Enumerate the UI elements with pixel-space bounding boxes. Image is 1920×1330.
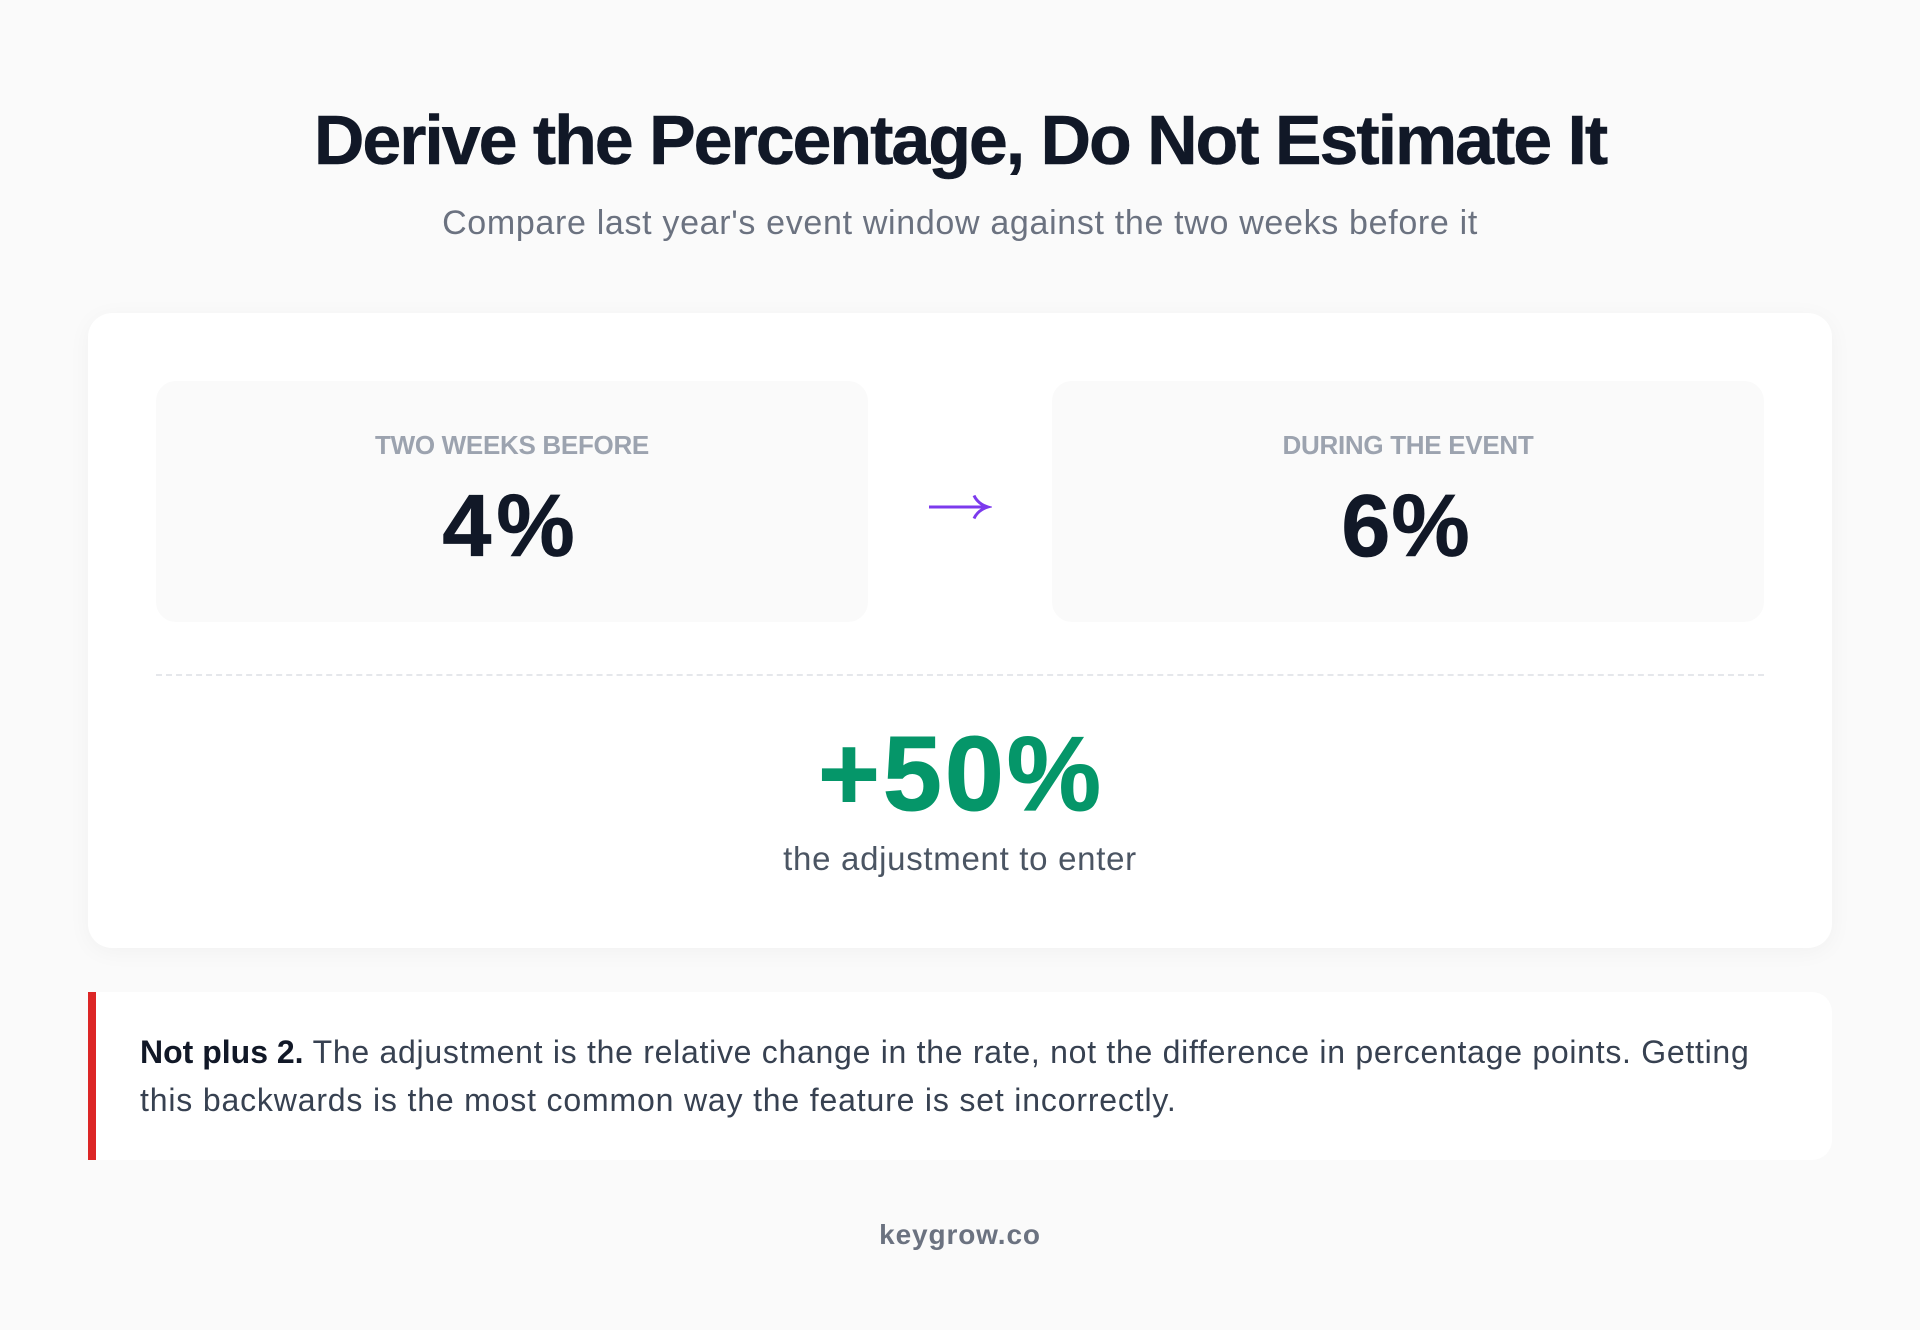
result caption: the adjustment to enter — [783, 840, 1137, 877]
label: during the event: DURING THE EVENT — [1283, 430, 1533, 460]
panel: two weeks before — [156, 381, 868, 622]
callout text line 2: this backwards is the most common way the feature is set incorrectly. — [140, 1082, 1177, 1118]
panel: during the event — [1052, 381, 1764, 622]
value: 4%: 4% — [442, 476, 580, 575]
value: 6%: 6% — [1341, 476, 1471, 575]
callout text line 1: Not plus 2. The adjustment is the relative change in the rate, not the difference in percentage points. Getting — [140, 1034, 1749, 1070]
footer: keygrow.co — [879, 1219, 1041, 1250]
result: +50%: +50% — [818, 715, 1104, 833]
title: Derive the Percentage, Do Not Estimate It — [314, 101, 1606, 179]
subtitle: Compare last year's event window against the two weeks before it — [442, 204, 1478, 242]
callout: not plus 2 — [88, 992, 1832, 1160]
panel: main comparison card — [88, 313, 1832, 948]
label: two weeks before: TWO WEEKS BEFORE — [375, 430, 649, 460]
icon: arrow — [929, 494, 992, 520]
